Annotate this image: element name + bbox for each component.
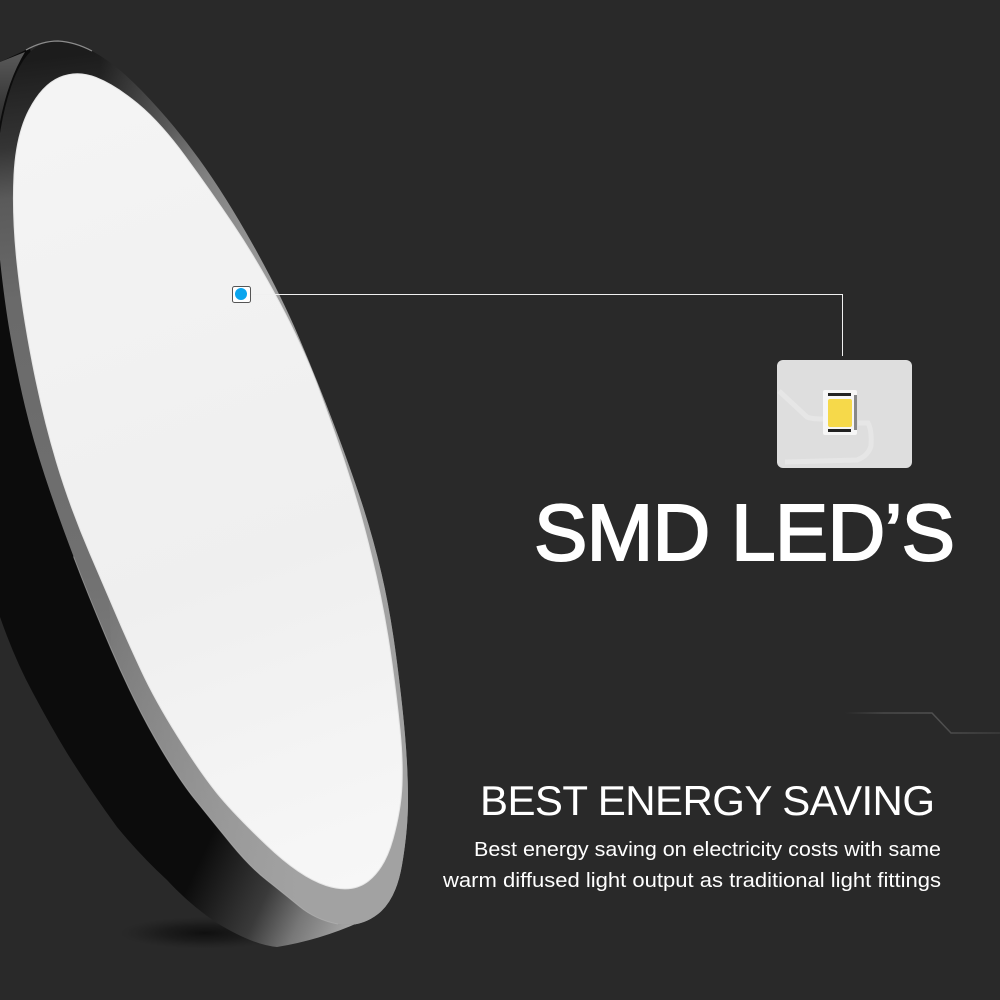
heading: SMD LED'S: SMD LED’S (534, 488, 955, 577)
lamp white diffuser (13, 74, 402, 889)
decorative line accent (845, 713, 1000, 733)
lamp rim top highlight (26, 41, 92, 51)
circuit traces (779, 391, 871, 462)
lamp: round black LED panel (0, 41, 408, 949)
lamp rim right-side light (84, 47, 408, 925)
description text: warm diffused light output as traditional light fittings (442, 869, 941, 892)
lamp front rim (0, 41, 408, 925)
callout connector line (251, 294, 842, 356)
lamp rim lower edge highlight (74, 556, 338, 924)
circuit board (777, 360, 912, 468)
lamp side body (0, 48, 360, 947)
callout marker: blue dot (232, 286, 250, 302)
LED chip body (823, 390, 857, 435)
subheading: BEST ENERGY SAVING: BEST ENERGY SAVING (480, 777, 935, 824)
callout: SMD LED chip close-up (777, 360, 912, 468)
description text (442, 838, 941, 892)
description text: Best energy saving on electricity costs with same (474, 838, 941, 861)
lamp shadow (120, 917, 290, 949)
lamp side top wedge (0, 52, 25, 122)
LED contacts (828, 393, 851, 396)
LED yellow emitter (828, 399, 852, 427)
